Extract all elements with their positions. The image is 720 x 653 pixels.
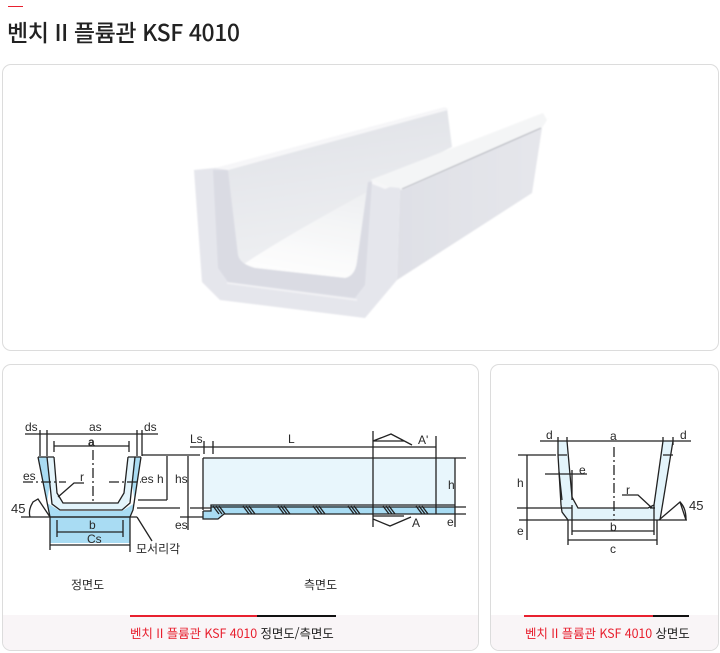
pale wall face xyxy=(203,458,455,507)
side view labels xyxy=(190,432,455,592)
side view labels: 측면도 xyxy=(304,578,337,592)
front view labels: as xyxy=(89,420,102,434)
front view labels: h xyxy=(157,472,164,486)
top view labels: b xyxy=(610,520,617,534)
caption rule: top view xyxy=(524,615,689,617)
side view labels: Ls xyxy=(190,432,203,446)
top view labels: d xyxy=(546,428,553,442)
front view labels: 모서리각 xyxy=(136,542,180,556)
front view labels: b xyxy=(89,518,96,532)
top view labels: e xyxy=(579,463,586,477)
title accent mark xyxy=(8,6,23,7)
front view labels: es xyxy=(141,472,154,486)
pale flume section xyxy=(558,441,673,520)
front view labels: hs xyxy=(175,472,188,486)
panel: product photo xyxy=(2,64,719,351)
front view labels: Cs xyxy=(87,532,102,546)
side view labels: L xyxy=(288,432,295,446)
top view labels: c xyxy=(610,542,616,556)
side view labels: A xyxy=(412,516,420,530)
front view labels: es xyxy=(23,469,36,483)
diagram: top view xyxy=(517,437,691,545)
top view labels xyxy=(517,428,703,556)
caption band: front and side view xyxy=(3,615,478,650)
front view labels: es xyxy=(175,518,188,532)
top view labels: r xyxy=(626,483,630,497)
caption band: top view xyxy=(491,615,718,650)
front view labels: ds xyxy=(144,420,157,434)
top view labels: e xyxy=(517,524,524,538)
caption band: front and side view: 벤치 II 플륨관 KSF 4010 정면도/측면도 xyxy=(130,623,334,642)
caption rule: front and side view xyxy=(130,615,336,617)
product photo: concrete flume xyxy=(194,107,547,318)
panel: top view xyxy=(490,364,719,651)
side view labels: e xyxy=(447,515,454,529)
blue bed strip xyxy=(203,505,455,519)
front view labels xyxy=(11,420,188,592)
top view labels: d xyxy=(680,428,687,442)
caption band: top view: 벤치 II 플륨관 KSF 4010 상면도 xyxy=(525,623,690,642)
top view labels: a xyxy=(610,429,617,443)
side view labels: A' xyxy=(418,433,428,447)
front view labels: r xyxy=(80,470,84,484)
top view labels: 45 xyxy=(689,498,703,513)
front view labels: 정면도 xyxy=(71,578,104,592)
front view labels: 45 xyxy=(11,501,25,516)
side view labels: h xyxy=(448,478,455,492)
top view labels: h xyxy=(517,476,524,490)
pale inner channel xyxy=(47,457,134,510)
diagram: side view xyxy=(180,431,466,527)
title: 벤치 II 플륨관 KSF 4010 xyxy=(7,14,240,48)
front view labels: a xyxy=(88,435,95,449)
blue concrete body xyxy=(38,457,141,543)
diagram: front view cross-section xyxy=(21,430,200,552)
front view labels: ds xyxy=(25,420,38,434)
panel: front and side view xyxy=(2,364,479,651)
